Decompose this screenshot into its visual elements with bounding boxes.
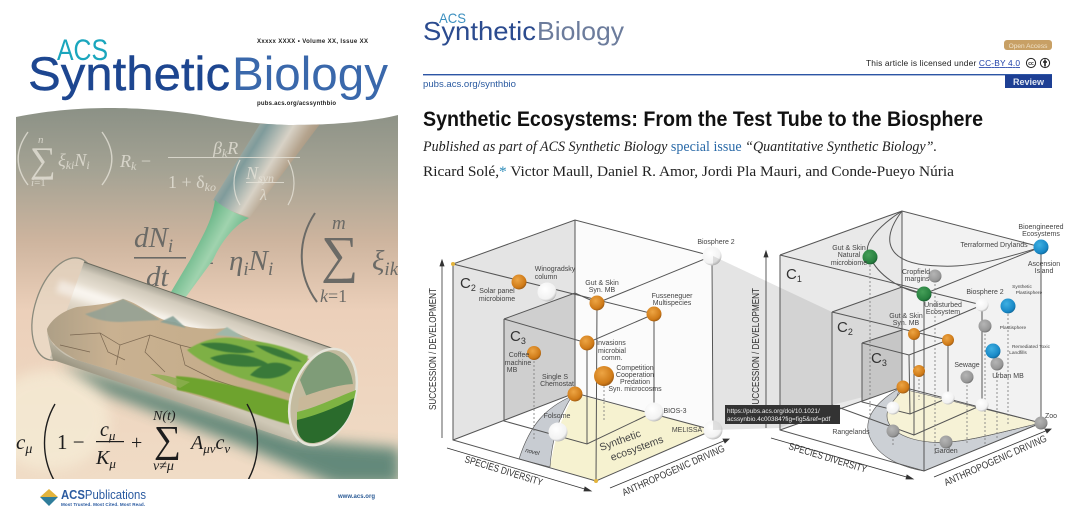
journal logo: [423, 10, 624, 46]
main equation: i: [268, 259, 273, 280]
niche curves: [867, 211, 1041, 294]
cover artwork: [0, 104, 400, 485]
node labels: BIOS-3: [664, 408, 687, 415]
synthetic ecosystems label: Synthetic: [598, 428, 643, 454]
axis labels: ANTHROPOGENIC DRIVING: [621, 443, 727, 499]
node labels: comm.: [602, 355, 623, 362]
upper equation: 1 + δ: [168, 172, 205, 192]
class labels: C: [460, 275, 471, 292]
upper equation: ko: [205, 180, 216, 194]
lower equation: K: [96, 447, 109, 469]
right wall tint: [575, 220, 713, 430]
journal logo: Biology: [537, 16, 624, 46]
node labels: microbiome: [831, 260, 867, 267]
node labels: Competition: [616, 365, 654, 372]
wall C3: [504, 293, 575, 421]
node labels: Syn. MB: [893, 320, 920, 327]
lower equation: +: [131, 432, 142, 454]
node labels: Cooperation: [616, 372, 654, 379]
ACS Publications logo: [40, 488, 375, 507]
node labels: Solar panel: [479, 288, 515, 295]
node labels: Bioengineered: [1018, 224, 1064, 231]
right cube diagram: Landfills: [1009, 350, 1027, 356]
node labels: Island: [1035, 268, 1053, 275]
main equation: k=1: [320, 286, 347, 306]
node labels: Sewage: [954, 362, 980, 369]
soil: [47, 299, 310, 415]
silver lower band: [47, 333, 300, 442]
lower equation: c: [216, 432, 225, 454]
green hills: [187, 338, 308, 398]
article title: Synthetic Ecosystems: From the Test Tube to the Biosphere: [423, 108, 983, 131]
right cube diagram: C: [871, 350, 882, 367]
right cube diagram: 3: [882, 358, 887, 368]
glass tube: [31, 257, 333, 442]
yellow floor: [887, 389, 1041, 442]
left cube diagram: [428, 220, 735, 499]
ACS Publications logo: ACSPublications: [61, 488, 146, 502]
URL tooltip: [725, 405, 840, 424]
axis labels: [751, 288, 1049, 489]
axis labels: SPECIES DIVERSITY: [787, 441, 868, 476]
node labels: Biosphere 2: [697, 239, 735, 246]
cover masthead: Synthetic: [28, 47, 230, 100]
cube edges: [780, 211, 1041, 471]
node labels: Coffee: [509, 352, 529, 359]
right cube diagram: 2: [848, 327, 853, 337]
journal cover: [0, 34, 400, 507]
node labels: Ecosystems: [1022, 231, 1060, 238]
cover masthead: pubs.acs.org/acssynthbio: [257, 101, 336, 107]
back wall: [780, 211, 902, 430]
main equation: η: [229, 245, 243, 277]
URL tooltip: https://pubs.acs.org/doi/10.1021/: [727, 408, 820, 415]
lower equation: μ: [24, 442, 32, 457]
upper equation: k: [222, 146, 228, 160]
projection band between cubes: [713, 256, 832, 430]
upper equation: −: [136, 151, 151, 171]
cover masthead: Biology: [232, 47, 388, 100]
upper equation: N: [73, 150, 87, 170]
node labels: Cropfield: [902, 269, 930, 276]
node labels: Urban MB: [992, 373, 1024, 380]
node labels: Natural: [838, 252, 861, 259]
node labels: Winogradsky: [535, 266, 576, 273]
node labels: Gut & Skin: [585, 280, 619, 287]
node labels: Predation: [620, 379, 650, 386]
review tag: [1005, 75, 1052, 88]
license line: cc: [1028, 61, 1034, 67]
lower equation: μ: [108, 456, 116, 471]
mountain: [85, 299, 160, 322]
axis labels: SPECIES DIVERSITY: [463, 454, 544, 489]
light pool: [16, 370, 110, 468]
lower equation: [16, 404, 258, 482]
node labels: Single S: [542, 374, 568, 381]
axis labels: [428, 288, 727, 499]
class labels: 1: [797, 274, 802, 284]
review tag: Review: [1013, 77, 1045, 87]
upper equation: λ: [259, 187, 267, 204]
node labels: MB: [507, 367, 518, 374]
upper equation: k: [131, 159, 137, 173]
node labels: Invasions: [596, 340, 626, 347]
node labels: Multispecies: [653, 300, 692, 307]
class labels: 2: [471, 283, 476, 293]
ACS Publications logo: www.acs.org: [337, 494, 375, 500]
node labels: Rangelands: [832, 429, 870, 436]
node labels: Zoo: [1045, 413, 1057, 420]
lower equation: ν: [224, 441, 230, 456]
left cube diagram: C: [510, 328, 521, 345]
main equation: ξ: [372, 245, 384, 277]
novel label: novel: [525, 448, 541, 457]
lower equation: ν≠μ: [153, 459, 174, 474]
cover masthead: Xxxxx XXXX • Volume XX, Issue XX: [257, 39, 368, 45]
lower equation: μ: [108, 428, 116, 443]
axes: [764, 251, 1051, 479]
upper equation: i: [86, 158, 90, 172]
node labels: Gut & Skin: [832, 245, 866, 252]
upper equation: [18, 132, 300, 205]
journal URL: pubs.acs.org/synthbio: [423, 78, 516, 89]
lower equation: μν: [202, 441, 216, 456]
moss band: [176, 376, 300, 426]
node labels: MELISSA: [672, 427, 702, 434]
wall C2: [832, 287, 902, 405]
node labels: Syn. microcosms: [608, 386, 662, 393]
right cube diagram: C: [837, 319, 848, 336]
main equation: dt: [146, 261, 170, 293]
nodes: [862, 240, 1048, 448]
node labels: Chemostat: [540, 381, 574, 388]
header rule: [423, 74, 1052, 75]
cover masthead: [28, 34, 388, 107]
ACS Publications logo: Most Trusted. Most Cited. Most Read.: [61, 502, 145, 507]
upper equation: ∑: [30, 140, 56, 180]
right cube diagram: Plastisphere: [1016, 290, 1043, 296]
axis labels: SUCCESSION / DEVELOPMENT: [428, 288, 439, 410]
node labels: Ascension: [1028, 261, 1060, 268]
open access badge: Open Access: [1009, 43, 1048, 50]
node labels: Gut & Skin: [889, 313, 923, 320]
main equation: i: [243, 259, 249, 280]
published note: Published as part of ACS Synthetic Biology special issue “Quantitative Synthetic Biology”.: [422, 139, 937, 155]
yellow plane: [550, 394, 713, 481]
right cube diagram: Remediated Toxic: [1012, 344, 1051, 350]
axis labels: ANTHROPOGENIC DRIVING: [943, 433, 1049, 489]
upper equation: R: [226, 138, 238, 158]
lower equation: N(t): [152, 409, 176, 424]
upper equation: syn: [258, 171, 274, 185]
cover masthead: ACS: [57, 34, 108, 67]
lower equation: A: [191, 432, 203, 454]
nodes: [451, 246, 722, 483]
node labels: microbial: [598, 348, 626, 355]
tube end: [288, 348, 358, 446]
right cube diagram: Plastisphere: [1000, 325, 1027, 331]
cracks: [60, 332, 238, 388]
dotted drop lines: [870, 257, 1008, 455]
node labels: [479, 239, 735, 434]
lower equation: ∑: [154, 419, 181, 461]
journal logo: ACS: [439, 10, 466, 26]
upper equation: R: [120, 151, 131, 171]
node labels: [831, 224, 1064, 455]
upper equation: ki: [66, 158, 74, 172]
main equation: ik: [384, 259, 399, 280]
class labels: C: [786, 266, 797, 283]
journal logo: Synthetic: [423, 16, 536, 46]
wall C3: [862, 330, 902, 402]
upper equation: ξ: [58, 150, 66, 170]
node labels: Terraformed Drylands: [960, 242, 1028, 249]
node labels: margins: [905, 276, 930, 283]
lower equation: 1 −: [57, 430, 85, 454]
node labels: Syn. MB: [589, 287, 616, 294]
open access badge: [1004, 40, 1052, 50]
dotted drop lines: [534, 353, 604, 440]
node labels: Ecosystem: [926, 309, 960, 316]
main equation: ∑: [321, 227, 358, 284]
node labels: Folsome: [544, 413, 571, 420]
node labels: Undisturbed: [924, 302, 962, 309]
lower equation: c: [16, 430, 25, 454]
node labels: Fusseneguer: [652, 293, 693, 300]
main equation: N: [248, 245, 270, 277]
right cube diagram: Synthetic: [1012, 284, 1032, 290]
grey floor patch: [868, 388, 1041, 471]
main equation: [134, 213, 399, 306]
node labels: Biosphere 2: [966, 289, 1004, 296]
axis labels: SUCCESSION / DEVELOPMENT: [751, 288, 762, 410]
right cube diagram: [713, 211, 1064, 489]
node labels: column: [535, 274, 557, 281]
license line: This article is licensed under CC-BY 4.0: [866, 58, 1020, 68]
upper equation: n: [38, 134, 44, 146]
left cube diagram: 3: [521, 336, 526, 346]
upper equation: N: [246, 163, 258, 183]
node labels: Garden: [934, 448, 958, 455]
upper equation: β: [213, 138, 222, 158]
main equation: =: [198, 245, 214, 277]
synthetic ecosystems label: ecosystems: [609, 434, 665, 464]
wall C2: [453, 220, 575, 440]
node labels: machine: [505, 360, 531, 367]
URL tooltip: acssynbio.4c00384?fig=fig5&ref=pdf: [727, 416, 831, 423]
node labels: microbiome: [479, 296, 515, 303]
article header: [422, 10, 1052, 180]
authors: Ricard Solé, * Victor Maull, Daniel R. Amor, Jordi Pla Mauri, and Conde-Pueyo Núria: [423, 164, 955, 180]
main equation: m: [332, 213, 346, 234]
cube edges: [453, 220, 713, 481]
axes: [440, 260, 729, 491]
upper equation: i=1: [31, 177, 46, 189]
grey novel patch: [519, 396, 572, 467]
lower equation: c: [100, 419, 109, 441]
main equation: i: [168, 236, 173, 257]
main equation: dN: [134, 222, 168, 254]
pipette: [213, 124, 320, 217]
tube shadow: [60, 362, 400, 485]
